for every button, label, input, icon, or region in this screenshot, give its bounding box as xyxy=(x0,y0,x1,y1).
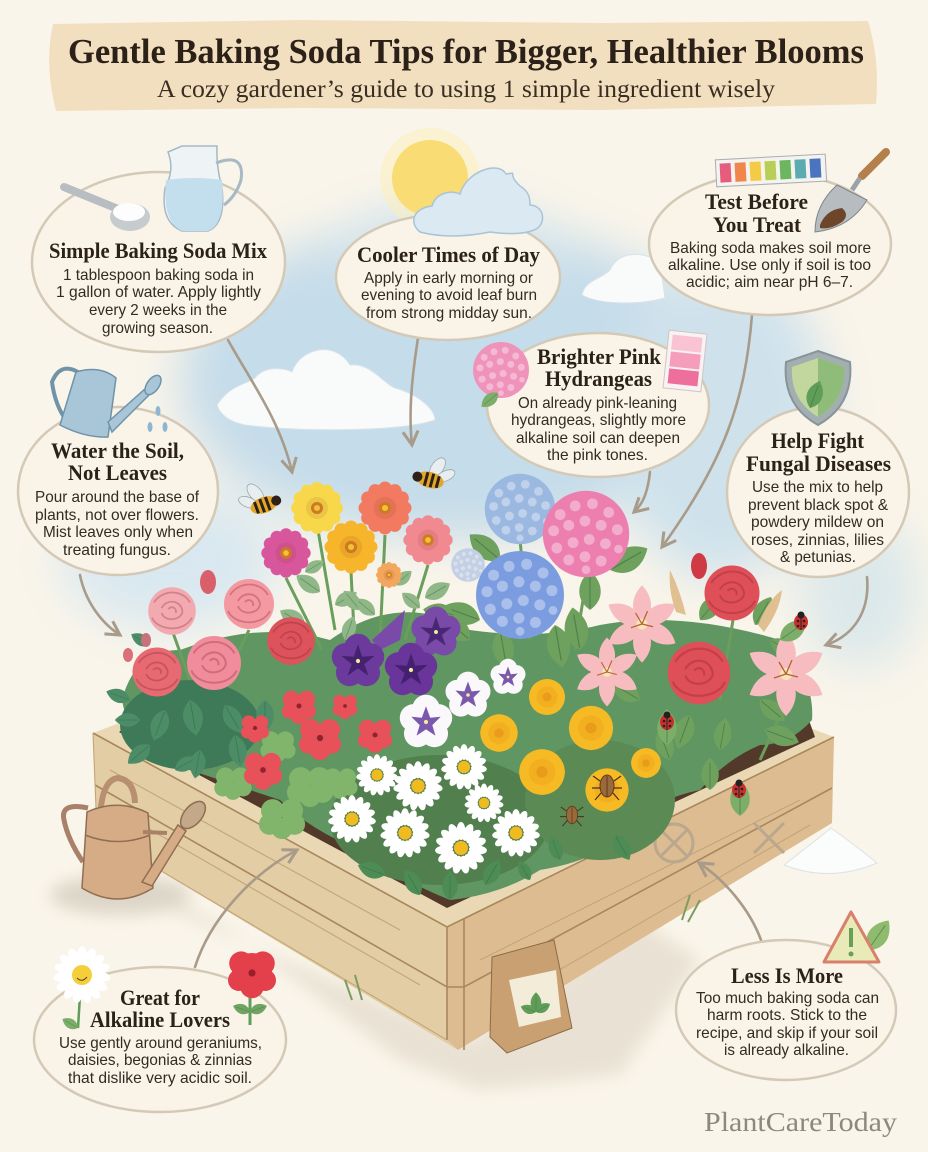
panel: alkaline lovers xyxy=(34,946,286,1112)
icon: warning triangle xyxy=(824,912,897,962)
body text: Baking soda makes soil more xyxy=(670,240,871,257)
heading: Fungal Diseases xyxy=(746,451,891,476)
body text: Mist leaves only when xyxy=(43,524,193,541)
icon: smiling daisy xyxy=(53,946,111,1032)
body text: acidic; aim near pH 6–7. xyxy=(686,274,853,291)
icon: seed bag xyxy=(490,940,572,1053)
panel: cooler times xyxy=(336,214,560,340)
icon: bees xyxy=(232,450,461,521)
icon: sun xyxy=(380,128,480,228)
body text: daisies, begonias & zinnias xyxy=(68,1052,252,1069)
heading: Great for xyxy=(120,985,200,1010)
panel: test before you treat xyxy=(649,152,891,315)
marigolds xyxy=(480,679,661,826)
arrow: pink hydrangeas xyxy=(634,472,650,512)
arrows xyxy=(80,315,867,967)
daisies xyxy=(328,744,540,874)
body text: that dislike very acidic soil. xyxy=(68,1070,252,1087)
body text xyxy=(511,395,686,464)
body text xyxy=(35,489,200,559)
icon: water drops xyxy=(148,406,168,432)
roses left xyxy=(123,570,315,696)
body text xyxy=(361,270,537,322)
zinnias xyxy=(261,481,453,588)
bed right face xyxy=(447,737,834,1050)
heading: Water the Soil, xyxy=(51,438,184,463)
title: Gentle Baking Soda Tips for Bigger, Healthier Blooms xyxy=(68,32,864,71)
body text: 1 tablespoon baking soda in xyxy=(63,267,254,284)
icon: red geranium xyxy=(228,951,276,1025)
body text: Too much baking soda can xyxy=(696,990,879,1007)
icon: pitcher xyxy=(164,146,241,231)
watermark: PlantCareToday xyxy=(704,1107,898,1137)
icon: pH strip xyxy=(715,154,827,187)
bed rim xyxy=(93,722,834,927)
body text: growing season. xyxy=(102,320,213,337)
body text: roses, zinnias, lilies xyxy=(751,532,884,549)
arrow: simple mix xyxy=(228,340,292,472)
body text: plants, not over flowers. xyxy=(35,507,199,524)
body text: recipe, and skip if your soil xyxy=(696,1025,878,1042)
icon: trowel xyxy=(815,152,886,232)
body text: is already alkaline. xyxy=(724,1042,849,1059)
body text: On already pink-leaning xyxy=(518,395,677,412)
icon: copper watering can xyxy=(64,778,210,899)
ground wash xyxy=(50,875,700,1090)
icon: baking soda pile xyxy=(784,828,877,874)
panel: brighter pink hydrangeas xyxy=(473,330,709,477)
panel: water the soil xyxy=(18,369,218,575)
hydrangeas xyxy=(451,474,629,639)
petunias xyxy=(332,607,526,747)
panel: simple mix xyxy=(32,146,285,352)
body text: Use the mix to help xyxy=(752,479,883,496)
heading: Not Leaves xyxy=(68,460,167,485)
body text: 1 gallon of water. Apply lightly xyxy=(56,284,261,301)
heading xyxy=(537,344,661,391)
heading xyxy=(746,428,891,476)
arrow: test xyxy=(662,315,752,547)
arrow: less xyxy=(699,863,761,940)
body text: alkaline. Use only if soil is too xyxy=(668,257,871,274)
heading: Test Before xyxy=(705,189,808,214)
body text xyxy=(668,240,871,291)
icon: blue watering can xyxy=(52,369,164,437)
soil xyxy=(119,640,815,908)
body text: hydrangeas, slightly more xyxy=(511,412,686,429)
geraniums xyxy=(241,691,392,790)
grass tufts xyxy=(345,895,700,1000)
raised bed xyxy=(93,640,834,1050)
icon: pink swatches xyxy=(663,330,707,392)
heading: Less Is More xyxy=(731,963,843,988)
marks on wood xyxy=(655,823,784,862)
body text: Pour around the base of xyxy=(35,489,200,506)
body text: Use gently around geraniums, xyxy=(59,1035,262,1052)
foliage xyxy=(104,480,812,900)
body text xyxy=(59,1035,262,1087)
body text: powdery mildew on xyxy=(751,514,884,531)
body text: every 2 weeks in the xyxy=(89,302,227,319)
heading xyxy=(51,438,184,485)
panel: less is more xyxy=(676,912,897,1080)
icon: shield xyxy=(786,351,850,425)
icon: beetles xyxy=(560,775,622,826)
body text: prevent black spot & xyxy=(748,497,888,514)
icon: cloud over sun xyxy=(414,168,543,236)
body text: evening to avoid leaf burn xyxy=(361,287,537,304)
body text xyxy=(56,267,261,337)
panel: fungal diseases xyxy=(727,351,909,577)
heading: Help Fight xyxy=(771,428,864,453)
body text: the pink tones. xyxy=(547,447,648,464)
body text: & petunias. xyxy=(780,549,856,566)
ladybugs and leaf xyxy=(657,612,812,816)
heading: Brighter Pink xyxy=(537,344,661,369)
subtitle: A cozy gardener’s guide to using 1 simple ingredient wisely xyxy=(157,76,775,103)
roses right xyxy=(668,553,760,704)
body text xyxy=(696,990,879,1059)
lilies xyxy=(573,570,827,716)
clouds xyxy=(217,254,665,430)
sky wash xyxy=(60,205,920,670)
arrow: water xyxy=(80,575,120,635)
body text: Apply in early morning or xyxy=(364,270,534,287)
body text xyxy=(748,479,888,566)
heading: You Treat xyxy=(713,212,801,237)
arrow: alkaline xyxy=(195,850,297,967)
body text: alkaline soil can deepen xyxy=(516,430,680,447)
bed left face xyxy=(93,733,458,1050)
heading: Hydrangeas xyxy=(545,366,652,391)
body text: harm roots. Stick to the xyxy=(707,1007,867,1024)
heading: Cooler Times of Day xyxy=(357,242,541,267)
body text: from strong midday sun. xyxy=(366,305,532,322)
body text: treating fungus. xyxy=(63,542,171,559)
title banner xyxy=(49,20,877,111)
icon: pink hydrangea xyxy=(473,342,529,411)
arrow: fungal xyxy=(826,577,867,645)
heading: Alkaline Lovers xyxy=(90,1007,230,1032)
arrow: cooler times xyxy=(411,338,418,445)
heading xyxy=(705,189,808,237)
icon: spoon xyxy=(64,187,150,231)
heading: Simple Baking Soda Mix xyxy=(49,238,268,263)
heading xyxy=(90,985,230,1032)
